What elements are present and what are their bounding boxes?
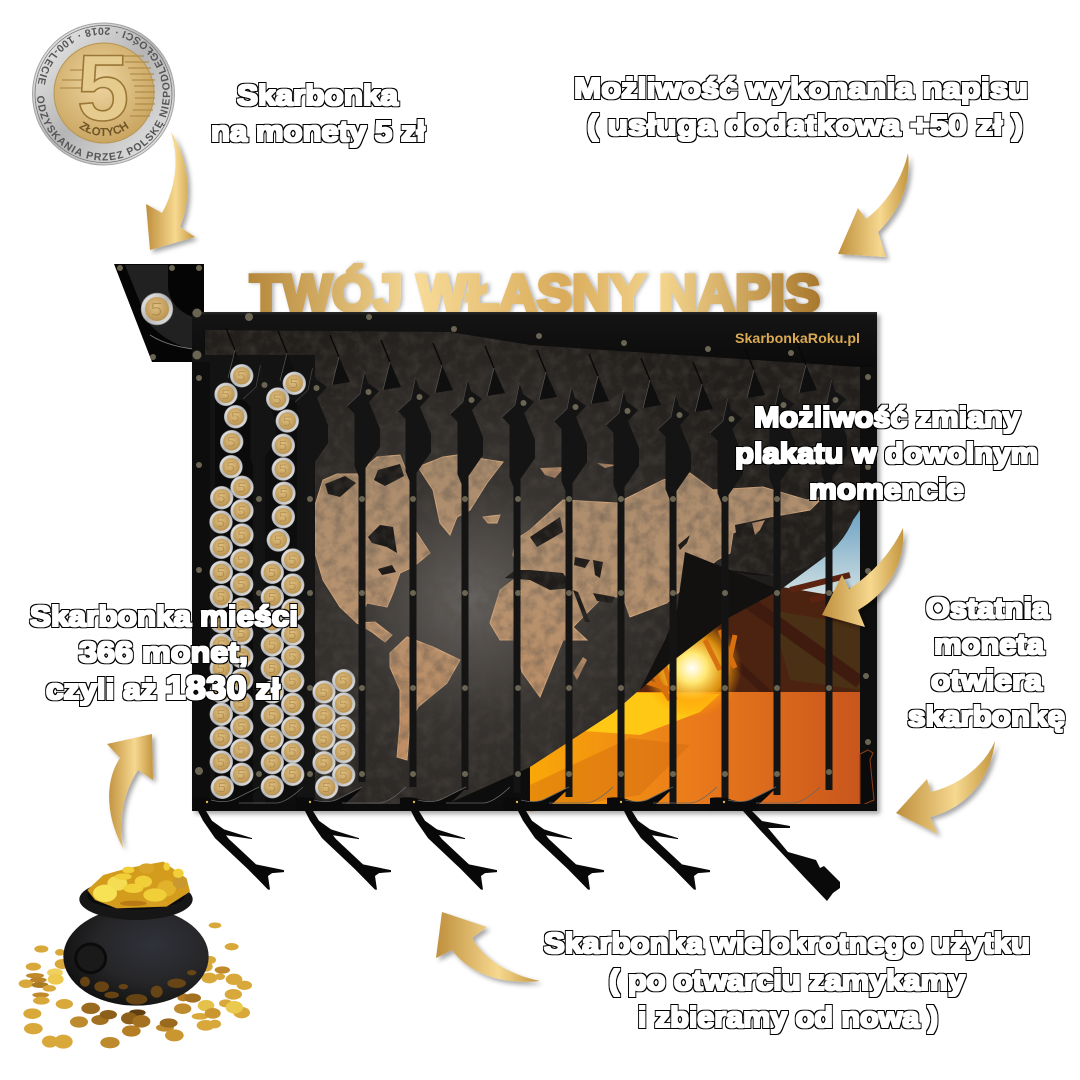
arrow: pot to capacity text xyxy=(107,734,153,848)
arrow: last coin opens xyxy=(896,741,995,834)
arrow: to lettering xyxy=(838,153,909,257)
text: reusable: ( po otwarciu zamykamy xyxy=(609,965,965,997)
text: coin type xyxy=(211,80,425,148)
arrow: to poster xyxy=(822,528,903,627)
board rivets xyxy=(117,265,871,777)
text: last coin opens xyxy=(908,593,1065,733)
text: last coin opens: Ostatnia xyxy=(926,593,1050,625)
text: custom lettering option xyxy=(574,73,1028,142)
poster beneath: beach scene xyxy=(530,500,860,812)
text: last coin opens: otwiera xyxy=(931,665,1043,697)
text: custom lettering option: Możliwość wykonania napisu xyxy=(574,73,1028,105)
text: last coin opens: skarbonkę xyxy=(908,701,1065,733)
text: replaceable poster: plakatu w dowolnym xyxy=(735,438,1038,470)
continent: North America xyxy=(315,455,430,642)
coin rails xyxy=(226,328,847,809)
board frame: bottom band xyxy=(192,787,877,811)
label: SkarbonkaRoku.pl: SkarbonkaRoku.pl xyxy=(735,330,860,346)
text: replaceable poster xyxy=(735,402,1038,506)
poster: world map xyxy=(205,330,860,810)
coin illustration: 5 zł: ZŁOTYCH xyxy=(79,121,129,136)
continent: Greenland and Iceland xyxy=(418,455,503,535)
title lettering: TWÓJ WŁASNY NAPIS: TWÓJ WŁASNY NAPIS xyxy=(250,265,820,323)
coin illustration: 5 zł: 5 xyxy=(77,35,129,140)
text: capacity: Skarbonka mieści xyxy=(30,601,298,633)
coin chute xyxy=(114,264,310,362)
continent: South America xyxy=(390,637,460,760)
text: coin type: Skarbonka xyxy=(237,80,399,112)
board: coin bank panel xyxy=(192,312,877,811)
text: reusable xyxy=(544,928,1030,1034)
continent: Eurasia and Africa xyxy=(272,463,823,697)
board frame: right side xyxy=(860,367,877,811)
arrow: reusable to clips xyxy=(436,912,540,982)
text: reusable: i zbieramy od nowa ) xyxy=(638,1002,938,1034)
arrow: coin to chute xyxy=(146,132,195,250)
text: reusable: Skarbonka wielokrotnego użytku xyxy=(544,928,1030,960)
board frame: top band xyxy=(192,312,877,367)
coins in slots xyxy=(210,364,355,799)
text: capacity: czyli aż 1830 zł xyxy=(46,669,280,706)
coin illustration: 5 zł: ODZYSKANIA PRZEZ POLSKĘ NIEPODLEGŁOŚCI · 2018 · 100-LECIE xyxy=(37,27,170,160)
board frame: left columns xyxy=(192,355,315,807)
hanging clips xyxy=(198,811,840,901)
text: coin type: na monety 5 zł xyxy=(211,116,425,148)
text: replaceable poster: Możliwość zmiany xyxy=(754,402,1020,434)
text: last coin opens: moneta xyxy=(934,629,1045,661)
text: replaceable poster: momencie xyxy=(809,474,964,506)
text: custom lettering option: ( usługa dodatkowa +50 zł ) xyxy=(587,110,1023,142)
text: capacity: 366 monet, xyxy=(79,637,248,669)
text: capacity xyxy=(30,601,298,706)
poster peeled corner xyxy=(640,552,790,690)
illustration: cauldron of gold coins xyxy=(19,862,252,1049)
penguin figurine xyxy=(860,750,874,806)
